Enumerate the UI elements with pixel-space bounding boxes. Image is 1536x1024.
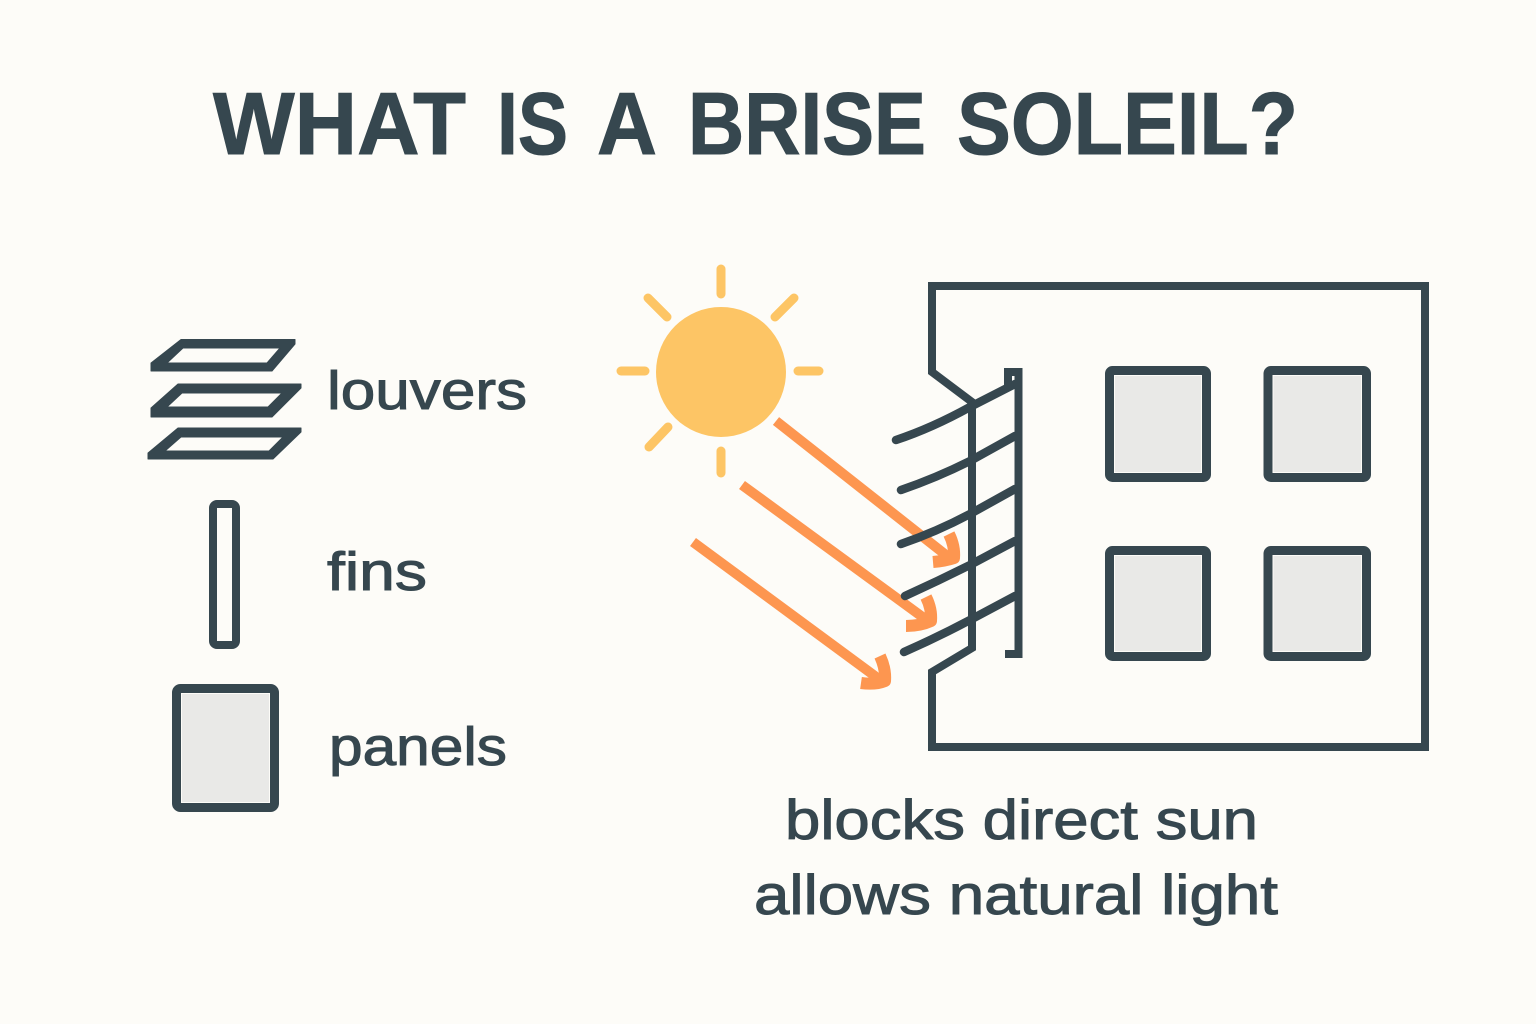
caption line 2: allows natural light bbox=[754, 863, 1279, 926]
title: BRISE bbox=[688, 74, 926, 173]
icon: sun bbox=[621, 269, 819, 473]
building with brise soleil bbox=[932, 286, 1425, 747]
icon: louvers bbox=[148, 340, 301, 459]
arrow 1 bbox=[776, 421, 954, 562]
title: SOLEIL? bbox=[957, 74, 1298, 173]
title: IS bbox=[497, 74, 568, 173]
title bbox=[213, 74, 1298, 173]
icon: fin bbox=[213, 504, 236, 645]
label: fins: fins bbox=[327, 542, 427, 602]
title: A bbox=[597, 74, 657, 173]
caption bbox=[754, 788, 1279, 926]
window top left bbox=[1110, 370, 1206, 478]
window bottom left bbox=[1110, 550, 1206, 656]
arrow 2 bbox=[742, 485, 931, 626]
label: louvers: louvers bbox=[327, 361, 527, 421]
icon: panel bbox=[176, 688, 274, 808]
panel: types legend bbox=[148, 340, 527, 808]
sun rays bbox=[693, 421, 954, 684]
building outline bbox=[932, 286, 1425, 747]
arrow 3 bbox=[693, 542, 885, 684]
title: WHAT bbox=[213, 74, 466, 173]
window bottom right bbox=[1268, 550, 1366, 656]
label: panels: panels bbox=[329, 717, 507, 777]
window top right bbox=[1268, 370, 1366, 478]
caption line 1: blocks direct sun bbox=[785, 788, 1258, 851]
louver slats on facade bbox=[896, 372, 1018, 654]
